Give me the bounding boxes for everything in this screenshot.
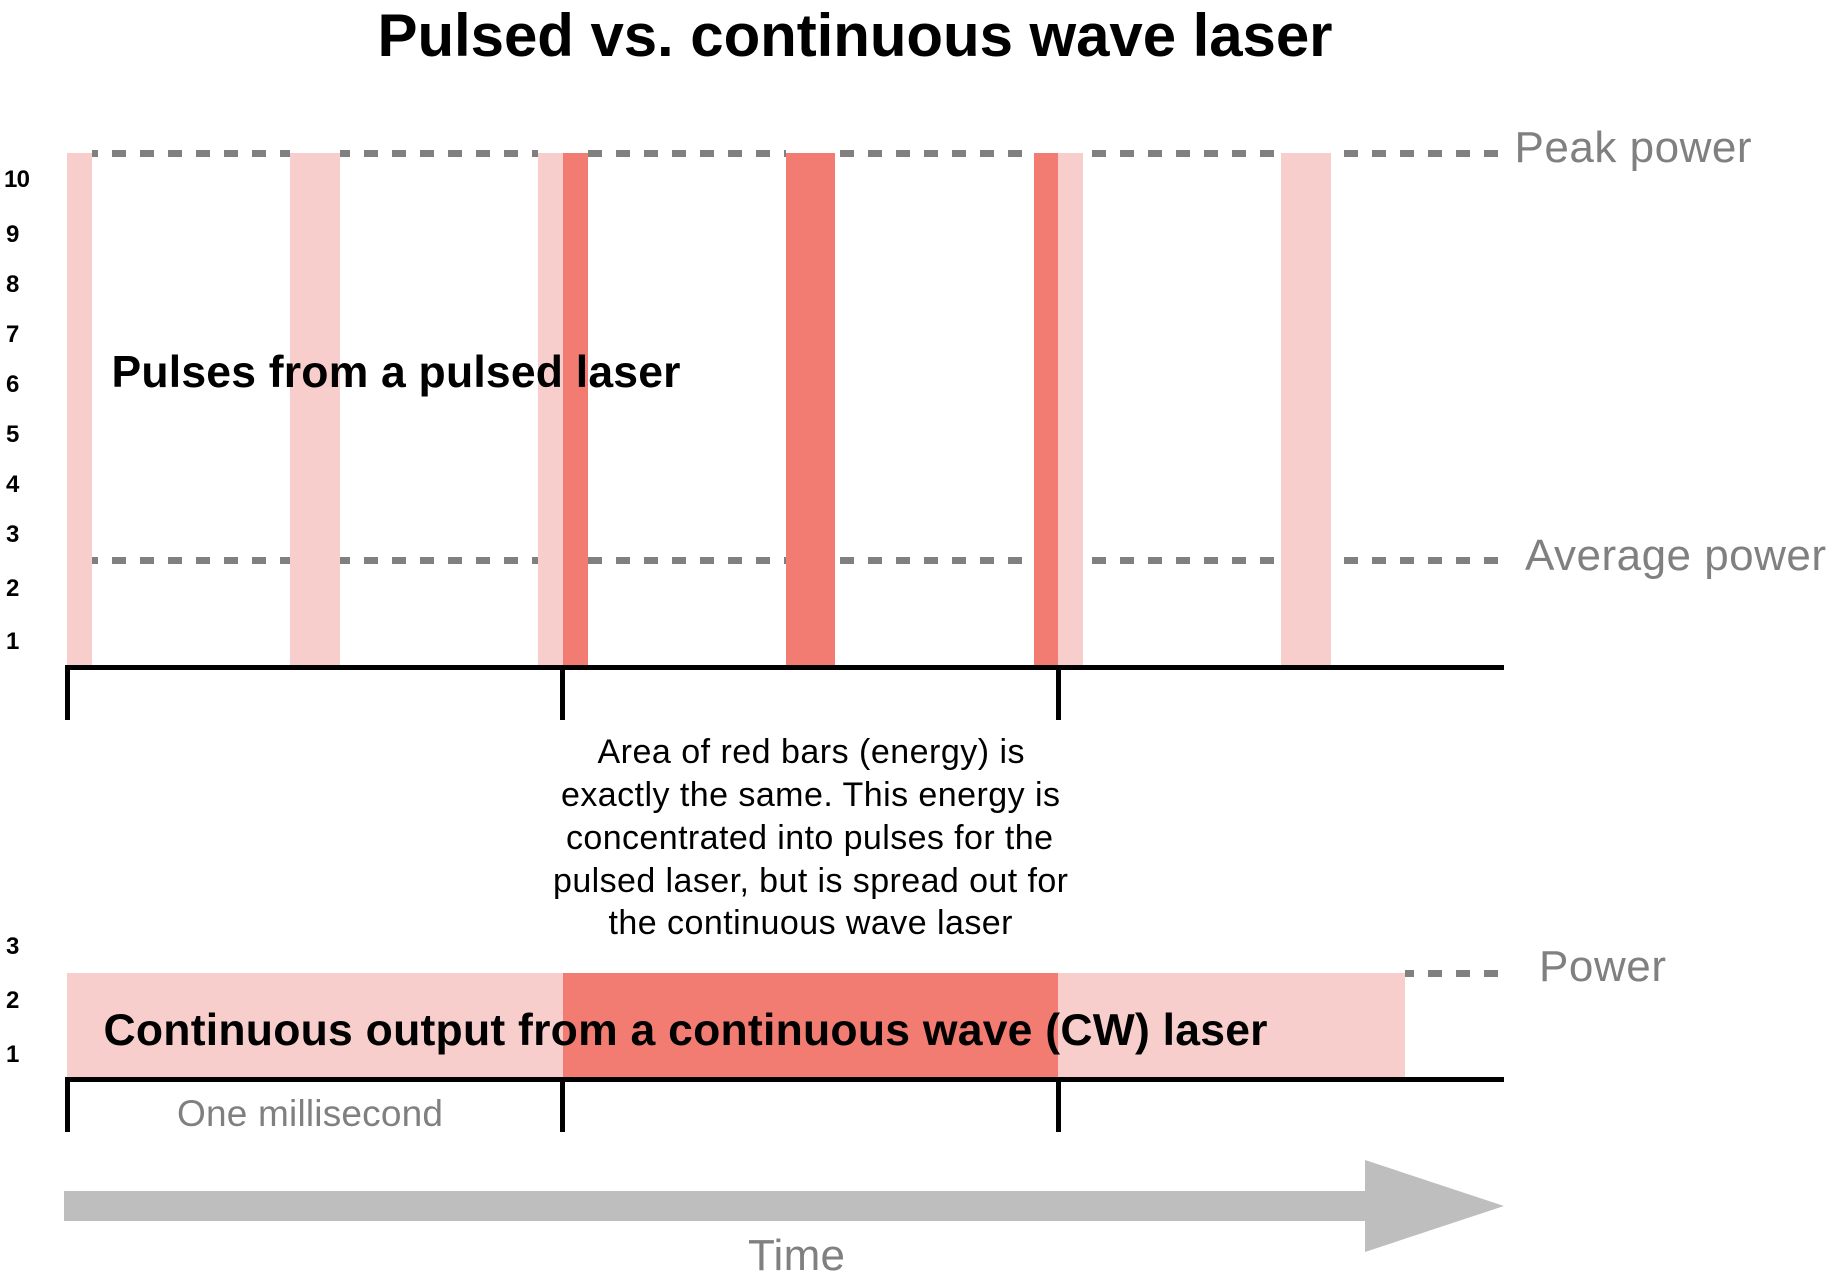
highlighted energy segment <box>563 973 1058 1077</box>
power scale numbers: 2 <box>6 987 19 1014</box>
explanatory text: Area of red bars (energy) is <box>598 733 1024 771</box>
label: peak power: Peak power <box>1514 123 1752 172</box>
power scale numbers: 5 <box>6 421 19 448</box>
panel: pulsed laser chart <box>4 123 1826 720</box>
label: average power: Average power <box>1525 531 1826 580</box>
power scale numbers: 3 <box>6 521 19 548</box>
explanatory text: concentrated into pulses for the <box>566 819 1053 857</box>
panel: continuous wave laser chart <box>6 933 1666 1134</box>
heading: continuous laser: Continuous output from a continuous wave (CW) laser <box>104 1006 1268 1055</box>
title: Pulsed vs. continuous wave laser <box>378 2 1332 69</box>
label: power: Power <box>1539 942 1666 991</box>
heading: pulsed laser: Pulses from a pulsed laser <box>112 348 680 397</box>
power scale numbers: 9 <box>6 221 19 248</box>
time axis with millisecond ticks <box>65 665 1504 720</box>
power scale numbers: 10 <box>4 166 30 193</box>
time axis with millisecond ticks <box>65 1077 1504 1132</box>
power scale numbers <box>4 166 30 655</box>
power scale numbers: 1 <box>6 628 19 655</box>
average power dashed line <box>84 557 1498 564</box>
power scale numbers: 7 <box>6 321 19 348</box>
power scale numbers: 3 <box>6 933 19 960</box>
explanatory text: the continuous wave laser <box>608 904 1012 942</box>
continuous output bar <box>67 973 1405 1077</box>
pulse bars <box>67 153 1331 665</box>
power scale numbers: 8 <box>6 271 19 298</box>
explanatory text: exactly the same. This energy is <box>561 776 1060 814</box>
power scale numbers: 6 <box>6 371 19 398</box>
power scale numbers: 1 <box>6 1041 19 1068</box>
label: time: Time <box>748 1231 845 1280</box>
power scale numbers: 2 <box>6 575 19 602</box>
explanatory text: pulsed laser, but is spread out for <box>553 862 1068 900</box>
explanatory text <box>553 733 1068 942</box>
label: one millisecond: One millisecond <box>177 1093 443 1134</box>
power dashed line <box>1405 970 1498 977</box>
arrow: time <box>64 1160 1504 1252</box>
peak power dashed line <box>84 150 1498 157</box>
power scale numbers <box>6 933 19 1068</box>
power scale numbers: 4 <box>6 471 20 498</box>
